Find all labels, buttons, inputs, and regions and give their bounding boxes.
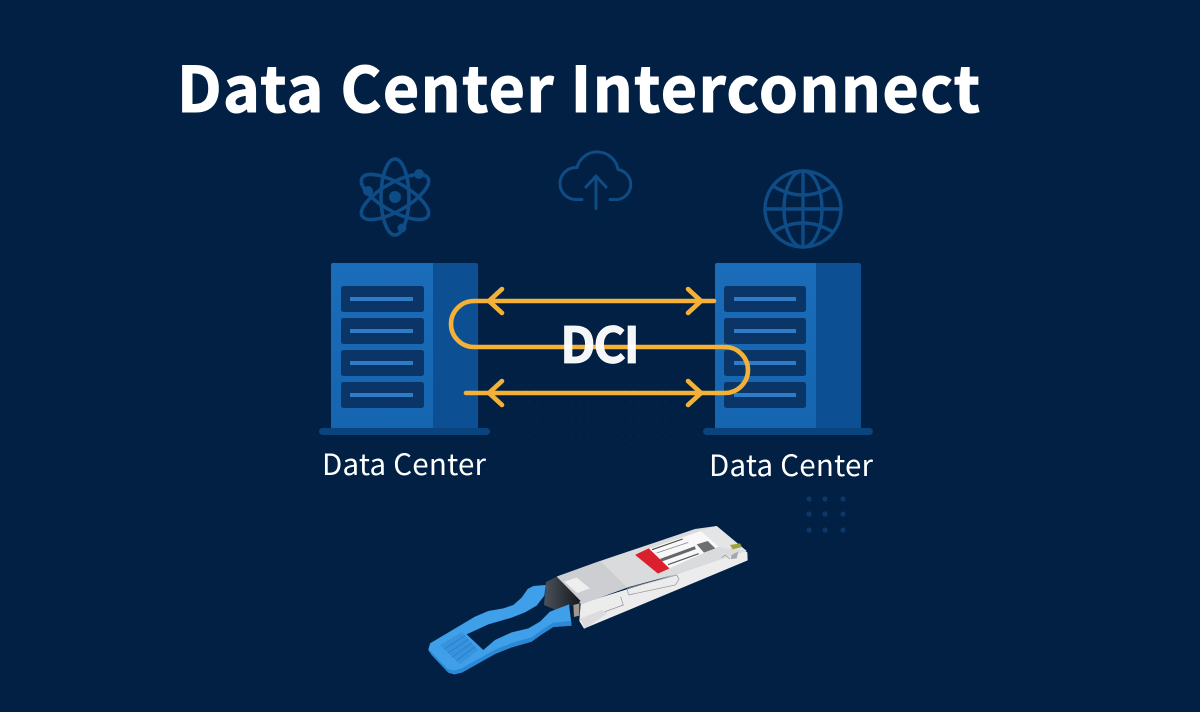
tab grip ridges bbox=[440, 632, 478, 664]
decorative 3x3 dot cluster bbox=[806, 496, 846, 533]
side engraving bbox=[581, 555, 730, 620]
QR code bbox=[697, 541, 715, 553]
rear panel bbox=[700, 526, 747, 551]
infographic canvas bbox=[182, 64, 980, 674]
dark port opening bbox=[544, 577, 581, 610]
icon: cloud upload bbox=[560, 152, 631, 208]
label print lines bbox=[652, 539, 699, 565]
icon: atom bbox=[355, 159, 435, 235]
front shell bbox=[557, 561, 627, 604]
label: DCI: DCI bbox=[560, 306, 640, 378]
module side face bbox=[579, 551, 748, 629]
gold contact bbox=[730, 543, 742, 549]
label: left data center: Data Center bbox=[322, 442, 487, 484]
title: Data Center Interconnect bbox=[177, 39, 980, 130]
panel: left data center server bbox=[319, 263, 490, 435]
tab shadow edge bbox=[428, 621, 572, 674]
metal front edge bbox=[573, 603, 579, 617]
module body bbox=[544, 526, 748, 629]
red tag bbox=[636, 549, 669, 573]
arrow: DCI serpentine link bbox=[451, 289, 748, 405]
product label bbox=[649, 531, 719, 569]
tab body bbox=[428, 585, 572, 674]
icon: QSFP transceiver module bbox=[428, 526, 748, 674]
pull tab bbox=[428, 585, 572, 674]
panel: right data center server bbox=[703, 263, 873, 435]
label: right data center: Data Center bbox=[709, 443, 874, 485]
module top face bbox=[557, 526, 747, 604]
shell window bbox=[564, 578, 590, 593]
icon: globe bbox=[765, 171, 841, 247]
rear screw recess bbox=[731, 552, 738, 559]
lower flange bbox=[581, 610, 607, 629]
